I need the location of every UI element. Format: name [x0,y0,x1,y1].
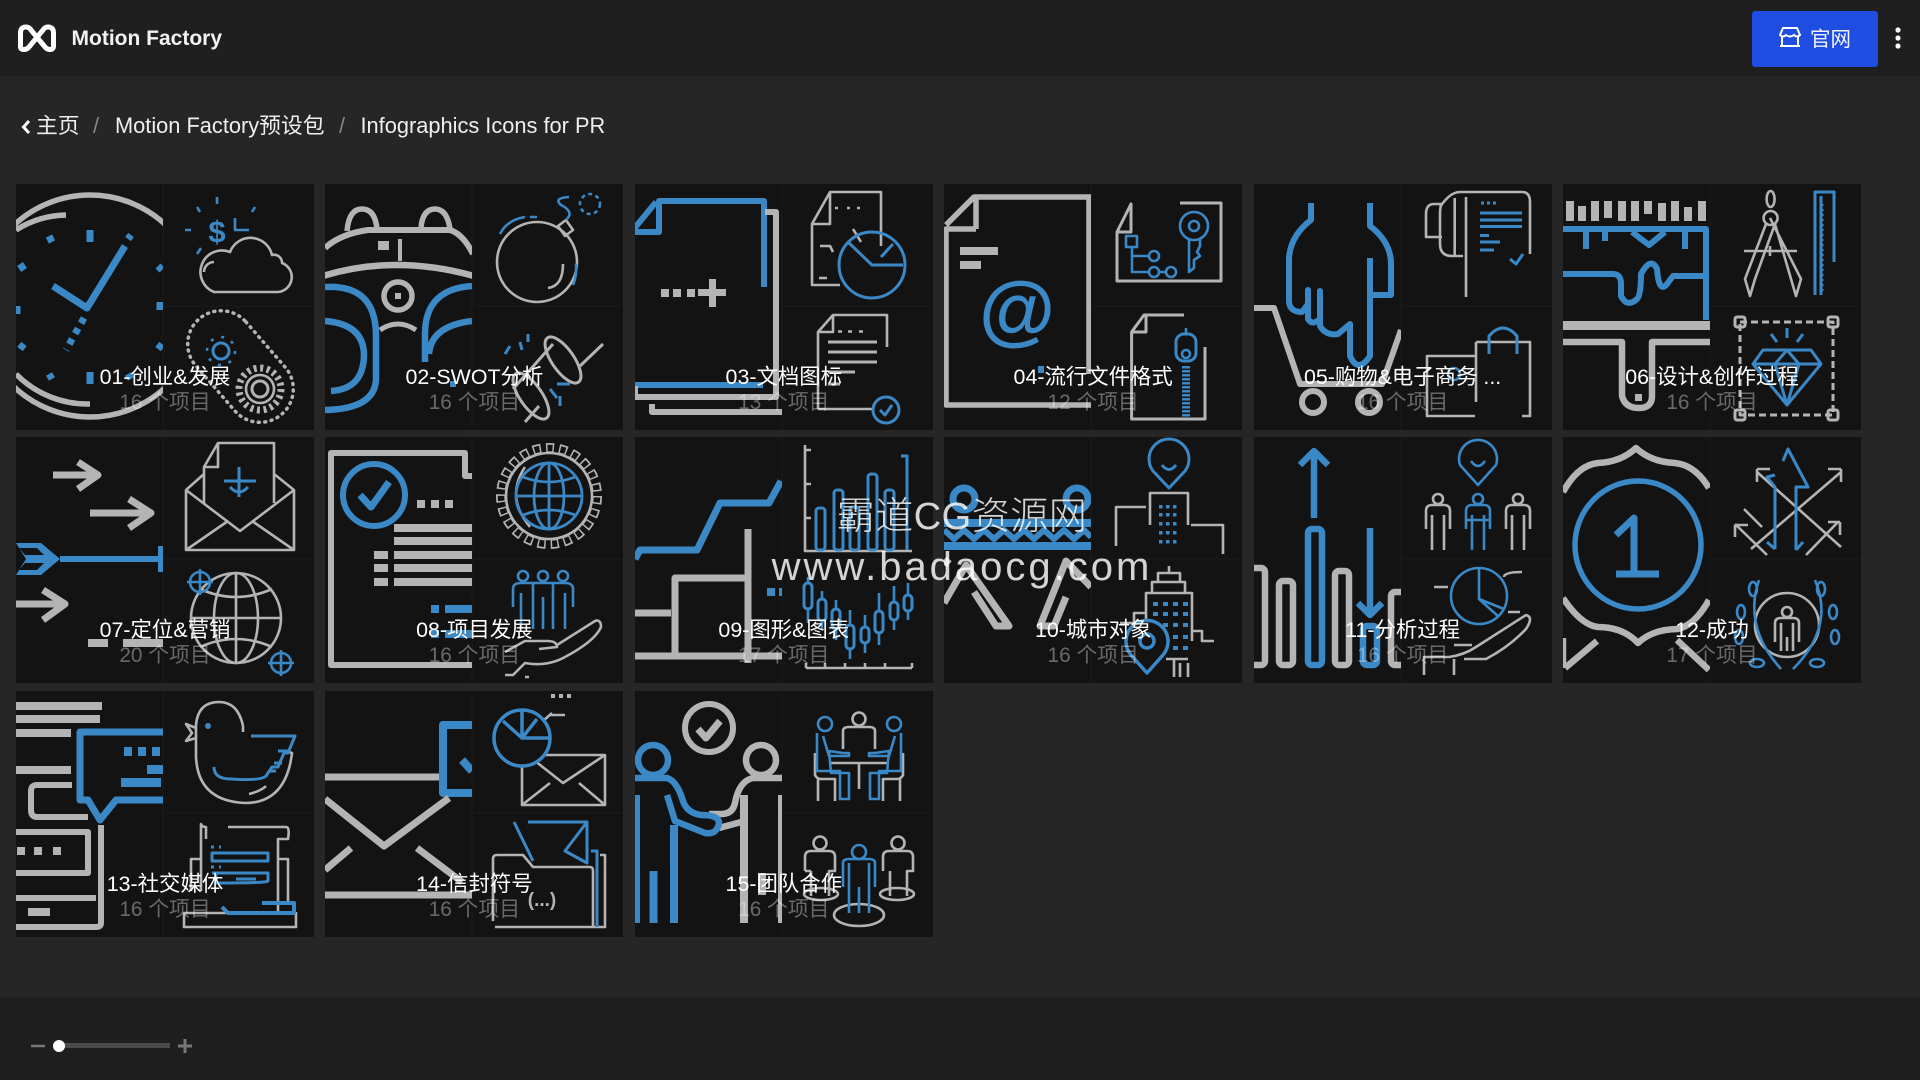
icons 15 [635,701,916,928]
card title: 12-成功 [1675,618,1749,642]
icon: award badge [1563,444,1710,672]
icon: gear belt [188,310,293,422]
icon: document at sign: @ [979,264,1055,352]
bottom zoom bar [0,997,1920,1080]
button label: 官网 [1810,28,1851,51]
card title: 04-流行文件格式 [1014,364,1173,388]
icon: skyscraper pin [1120,566,1214,677]
item count: 16 个项目 [1357,644,1448,667]
card title: 15-团队合作 [726,872,842,896]
icon: document plus [635,198,782,415]
icon: arrows [16,459,163,647]
item count: 17 个项目 [738,644,829,667]
icon: twitter bird [186,702,295,802]
icons 12 [1563,444,1842,672]
item count: 16 个项目 [429,390,520,414]
icon: bus stop canopy [944,484,1091,630]
icon: chat and list [16,702,163,930]
icons 09 [635,445,914,670]
icon: pie on hand [1424,568,1530,675]
card: 10 city objects [944,437,1242,683]
item count: 16 个项目 [119,898,211,920]
card title: 09-图形&图表 [718,618,849,642]
item count: 16 个项目 [119,390,211,414]
icon: dollar cloud: $ [208,214,226,248]
item count: 16 个项目 [738,898,829,920]
item count: 20 个项目 [119,644,211,667]
icon: Motion Factory logo [18,24,56,52]
icons 11 [1254,438,1532,675]
zoom slider [31,1039,192,1053]
card: 08 project development [325,437,623,683]
card: 02 SWOT analysis [325,184,623,430]
icons 05 [1254,190,1532,418]
icon: sitemap and key [1117,202,1221,280]
icon: gear globe [501,448,597,544]
card: 13 social media [16,690,314,936]
icon: envelope document [186,443,294,550]
icons 08 [328,443,602,678]
icon: team on platforms [804,836,914,926]
icon: bar chart [805,445,912,551]
card: 06 design and creation [1563,184,1861,430]
icon: crossing arrows [1735,449,1841,555]
card: 01 startup and growth [16,184,314,430]
icons 01 [16,192,295,424]
card: 15 teamwork [635,690,933,936]
watermark: site name: 霸道CG资源网 [837,496,1087,538]
icon: map pin building [1116,439,1223,554]
icon: meeting table [815,712,903,800]
top navigation bar [0,0,1920,76]
icons 14 [325,694,606,928]
card: 11 analysis process [1254,437,1552,683]
icons 06 [1563,190,1840,422]
card: 09 graphs and charts [635,437,933,683]
icon: pie envelope [494,696,605,804]
icon: storefront [1779,27,1801,47]
icon: bomb [497,194,600,302]
icon: stepped chart [635,479,782,663]
icon: more menu [1895,27,1901,49]
icon: bars and arrows [1254,448,1401,668]
icon: large envelope [325,721,472,898]
icon: candlestick chart [804,577,912,668]
icon: team on hand [505,571,601,677]
breadcrumb: home: 主页 [36,113,80,138]
icon: back chevron [22,120,30,134]
icon: social laptop [184,824,296,926]
icon: laurel person [1735,580,1839,669]
card: 04 popular file formats [944,184,1242,430]
icon: swot large [325,206,472,414]
card title: 01-创业&发展 [100,364,230,388]
card title: 02-SWOT分析 [405,364,543,388]
icons 03 [635,190,906,424]
card title: 03-文档图标 [726,364,842,388]
card title: 05-购物&电子商务 ... [1304,364,1501,388]
card title: 08-项目发展 [416,618,533,642]
item count: 16 个项目 [1357,390,1448,414]
card: 05 shopping and ecommerce [1254,184,1552,430]
card: 12 success [1563,437,1861,683]
breadcrumb separator: / [339,113,345,138]
icons 07 [16,442,296,676]
icon: broken chain [505,331,603,424]
item count: 16 个项目 [429,898,520,920]
icons 13 [16,700,298,930]
card: 14 envelope symbols [325,690,623,936]
icon: compass and ruler [1744,190,1834,296]
icon: team with pin [1426,440,1530,550]
button: official site [1752,11,1878,67]
card title: 13-社交媒体 [107,872,223,896]
icon: project document [328,450,472,668]
card title: 10-城市对象 [1035,618,1151,642]
icons 10 [944,438,1224,677]
breadcrumb navigation [22,113,605,138]
icon: diamond selection [1735,316,1838,420]
breadcrumb separator: / [93,113,99,138]
icon: zip file [1132,314,1205,418]
item count: 17 个项目 [1666,644,1758,667]
card title: 11-分析过程 [1345,618,1460,642]
icon: dollar cloud [185,196,292,292]
icon: clock [16,192,163,420]
item count: 13 个项目 [738,390,829,414]
icon: receipt [1426,192,1530,296]
breadcrumb: current page: Infographics Icons for PR [360,113,605,138]
watermark text [772,496,1152,589]
icon: hand and cart [1254,203,1401,416]
item count: 16 个项目 [429,644,520,667]
brand name: Motion Factory [72,27,222,50]
card title: 14-信封符号 [416,872,533,896]
icon: document pie chart [812,192,905,298]
item count: 12 个项目 [1048,390,1139,414]
icon: globe targets [187,569,294,676]
breadcrumb: presets: Motion Factory预设包 [115,113,325,138]
icons 04 [944,194,1222,420]
icon: document checklist [818,314,899,422]
icon: paint brush [1563,201,1710,412]
icon: folder: (...) [528,890,557,910]
icon: shopping bags [1427,328,1530,416]
card title: 06-设计&创作过程 [1625,364,1799,388]
item count: 16 个项目 [1666,390,1758,414]
icon: handshake [635,701,782,923]
card: 03 document icons [635,184,933,430]
icons 02 [325,192,604,423]
card: 07 positioning and marketing [16,437,314,683]
watermark: url: www.badaocg.com [772,545,1152,589]
icon: document at sign [944,194,1091,408]
item count: 16 个项目 [1048,644,1139,667]
card title: 07-定位&营销 [100,618,230,642]
icon: folder [493,822,605,926]
